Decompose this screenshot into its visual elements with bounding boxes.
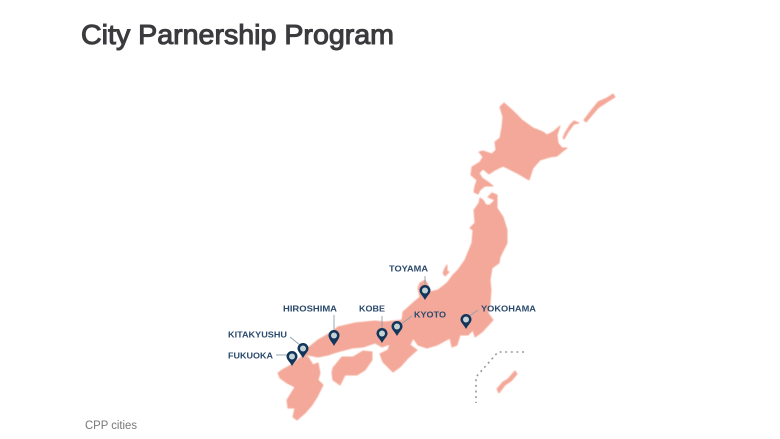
marker: Toyama: TOYAMA: [389, 264, 428, 274]
map of Japan: [278, 94, 615, 420]
region: Honshu: [300, 193, 507, 372]
marker: Kitakyushu: KITAKYUSHU: [228, 330, 287, 340]
marker: Fukuoka: [228, 350, 298, 366]
marker: Toyama: [389, 264, 430, 300]
title: City Parnership Program: [81, 19, 394, 50]
marker: Fukuoka: FUKUOKA: [228, 350, 273, 360]
marker: Kyoto: [392, 310, 447, 336]
region: Sado island: [443, 265, 449, 276]
marker: Hiroshima: HIROSHIMA: [283, 304, 337, 314]
marker: Kitakyushu: [228, 330, 308, 358]
inset divider: [476, 352, 524, 403]
marker: Kyoto: KYOTO: [414, 310, 447, 320]
region: Hokkaido: [471, 103, 567, 194]
marker: Kobe: [359, 304, 388, 343]
marker: Hiroshima: [283, 304, 340, 346]
caption: CPP cities: [85, 420, 137, 432]
region: Shikoku: [332, 351, 372, 385]
marker: Yokohama: [460, 304, 536, 329]
region: Okinawa islands: [497, 371, 517, 393]
marker: Kobe: KOBE: [359, 304, 385, 314]
marker: Yokohama: YOKOHAMA: [481, 304, 536, 314]
region: Kyushu: [278, 357, 323, 420]
region: Kuril islands: [563, 94, 615, 139]
